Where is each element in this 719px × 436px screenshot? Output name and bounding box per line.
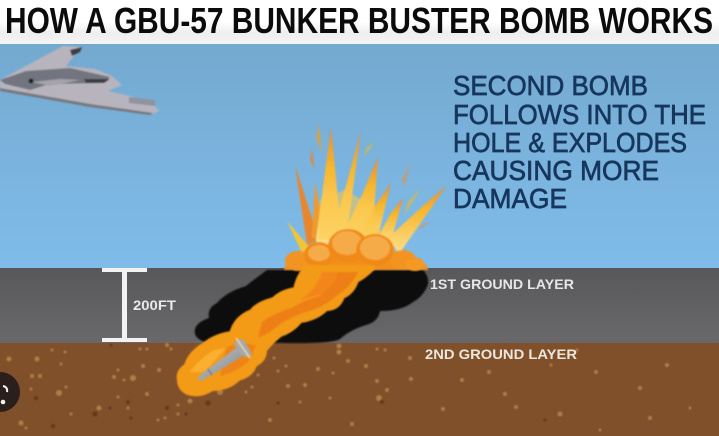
fireballs bbox=[284, 229, 428, 271]
sky background bbox=[0, 44, 719, 270]
label: 1st ground layer: 1ST GROUND LAYER bbox=[430, 276, 574, 292]
callout text: SECOND BOMB bbox=[453, 70, 648, 101]
callout text: CAUSING MORE bbox=[453, 155, 659, 186]
shards bbox=[310, 124, 431, 231]
measure: 200FT depth marker bbox=[102, 268, 177, 342]
bomb fire trail bbox=[180, 268, 372, 393]
1st ground layer band bbox=[0, 268, 719, 344]
measure: 200FT depth marker: 200FT bbox=[133, 298, 177, 313]
icon: stealth bomber bbox=[0, 46, 159, 115]
explosion bbox=[284, 124, 447, 271]
callout text bbox=[453, 70, 706, 214]
black crater bbox=[195, 270, 428, 343]
label: 2nd ground layer: 2ND GROUND LAYER bbox=[425, 346, 577, 362]
callout text: HOLE & EXPLODES bbox=[453, 127, 687, 158]
soil speckles bbox=[6, 343, 692, 432]
icon: round badge bbox=[0, 372, 20, 412]
icon: bunker buster bomb bbox=[197, 338, 252, 381]
callout text: DAMAGE bbox=[453, 183, 567, 214]
2nd ground layer band bbox=[0, 343, 719, 436]
